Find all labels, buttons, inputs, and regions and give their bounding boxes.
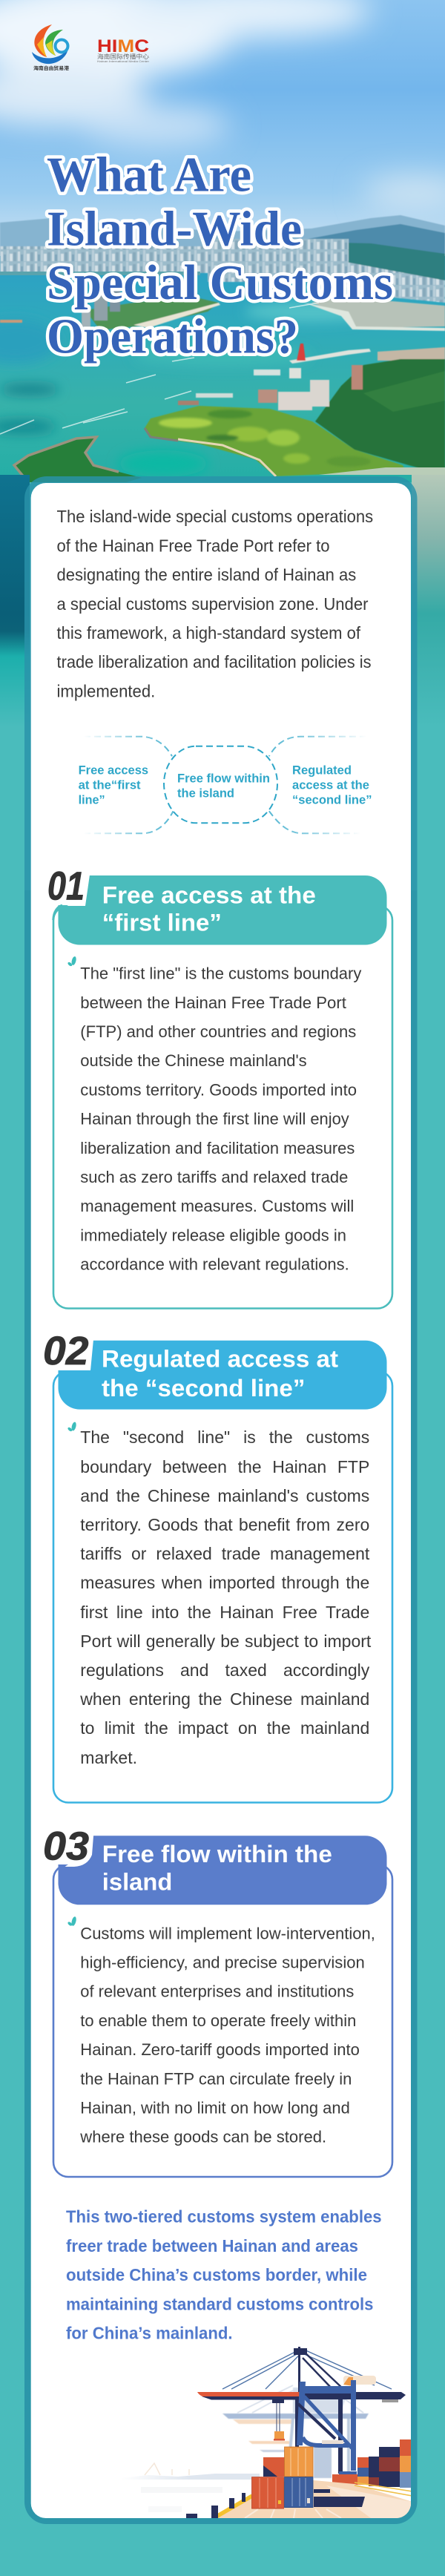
intro text: The island-wide special customs operations — [56, 507, 373, 526]
body text 01: between the Hainan Free Trade Port — [80, 993, 346, 1012]
body text 02: when entering the Chinese mainland — [80, 1689, 369, 1709]
heading 03 — [102, 1841, 332, 1895]
hoist and cargo — [272, 2399, 284, 2403]
intro text: this framework, a high-standard system of — [56, 623, 361, 643]
number 03: 03 — [43, 1824, 89, 1869]
quay ground — [186, 2480, 412, 2518]
intro text — [56, 507, 373, 700]
heading 03: Free flow within the — [102, 1841, 332, 1867]
body text 02: to limit the impact on the mainland — [80, 1718, 369, 1738]
label: first line: Free access — [79, 763, 148, 777]
label: free flow — [177, 772, 270, 801]
logo: HIMC: HIMC — [97, 36, 149, 56]
body text 01 — [80, 965, 361, 1274]
body text 01: liberalization and facilitation measures — [80, 1139, 355, 1157]
intro text: implemented. — [56, 681, 155, 700]
heading 02: Regulated access at — [102, 1346, 338, 1373]
title: Special Customs — [47, 255, 393, 310]
label: free flow: the island — [177, 787, 234, 801]
body text 03: of relevant enterprises and institutions — [80, 1982, 354, 2001]
heading 01: Free access at the — [102, 882, 316, 909]
closing statement: for China’s mainland. — [66, 2324, 233, 2343]
closing statement — [66, 2207, 382, 2343]
illustration: port with crane and containers — [121, 2347, 412, 2518]
logo caption: 海南自由贸易港 — [33, 65, 70, 71]
logo: HIMC: 海南国际传播中心 — [97, 53, 149, 60]
body text 03: Customs will implement low-intervention, — [80, 1924, 375, 1942]
body text 02: market. — [80, 1748, 137, 1767]
hero aerial photo of the coast — [0, 0, 445, 482]
body text 03: Hainan, with no limit on how long and — [80, 2098, 350, 2117]
body text 01: Hainan through the first line will enjoy — [80, 1110, 349, 1128]
body text 01: (FTP) and other countries and regions — [80, 1022, 356, 1041]
section 03 — [37, 1824, 392, 2177]
label: free flow: Free flow within — [177, 772, 270, 785]
intro text: of the Hainan Free Trade Port refer to — [56, 536, 329, 555]
label: first line: line” — [79, 794, 105, 807]
body text 01: accordance with relevant regulations. — [80, 1255, 349, 1274]
body text 01: such as zero tariffs and relaxed trade — [80, 1168, 348, 1186]
label: first line: at the“first — [79, 779, 141, 792]
icon: leaf bullet — [67, 956, 77, 967]
body text 01: immediately release eligible goods in — [80, 1226, 346, 1244]
foreground containers — [252, 2447, 313, 2508]
body text 03 — [79, 1924, 375, 2146]
main panel — [24, 476, 417, 2524]
diagram: three customs concepts — [79, 737, 372, 833]
closing statement: maintaining standard customs controls — [66, 2294, 374, 2313]
body text 02: boundary between the Hainan FTP — [80, 1457, 369, 1476]
icon: leaf bullet — [67, 1422, 77, 1432]
main crane — [197, 2347, 406, 2477]
label: second line: Regulated — [292, 763, 352, 777]
body text 02: regulations and taxed accordingly — [80, 1660, 369, 1680]
section 02 — [37, 1329, 392, 1803]
body text 01: management measures. Customs will — [80, 1197, 354, 1215]
intro text: designating the entire island of Hainan as — [56, 565, 356, 585]
heading 02 — [102, 1346, 338, 1402]
heading 01 — [102, 882, 316, 936]
side strips where the photo fades into teal — [0, 475, 445, 727]
body text 01: The "first line" is the customs boundary — [80, 965, 361, 983]
title: Island-Wide — [47, 201, 302, 256]
body text 02: and the Chinese mainland's customs — [80, 1486, 369, 1505]
closing statement: freer trade between Hainan and areas — [66, 2236, 358, 2255]
body text 03: high-efficiency, and precise supervision — [80, 1953, 365, 1972]
bollards — [186, 2493, 245, 2518]
logo: Hainan Free Trade Port — [32, 24, 70, 71]
label: second line: access at the — [292, 779, 369, 792]
distant skyline — [139, 2462, 260, 2493]
label: second line: “second line” — [292, 794, 372, 807]
intro text: trade liberalization and facilitation policies is — [56, 652, 371, 671]
title: What Are — [47, 148, 251, 203]
title: Operations? — [47, 309, 298, 364]
logo: HIMC: Hainan International Media Center — [97, 60, 150, 63]
body text 02: measures when imported through the — [80, 1573, 369, 1592]
body text 02: territory. Goods that benefit from zero — [80, 1515, 369, 1534]
heading 02: the “second line” — [102, 1375, 305, 1402]
body text 03: Hainan. Zero-tariff goods imported into — [80, 2040, 360, 2059]
number 01: 01 — [47, 864, 85, 908]
body text 03: the Hainan FTP can circulate freely in — [80, 2069, 352, 2088]
body text 02: Port will generally be subject to import — [80, 1632, 371, 1651]
background cranes — [222, 2385, 369, 2478]
icon: leaf bullet — [67, 1916, 77, 1927]
body text 01: outside the Chinese mainland's — [80, 1051, 307, 1070]
section 01 — [47, 864, 392, 1309]
closing statement: This two-tiered customs system enables — [66, 2207, 382, 2227]
body text 01: customs territory. Goods imported into — [80, 1080, 357, 1099]
heading 03: island — [102, 1868, 172, 1895]
body text 02: The "second line" is the customs — [80, 1427, 369, 1447]
number 02: 02 — [43, 1329, 89, 1373]
heading 01: “first line” — [102, 909, 222, 936]
body text 02: tariffs or relaxed trade management — [80, 1544, 369, 1563]
label: second line — [292, 763, 372, 807]
body text 03: where these goods can be stored. — [79, 2128, 326, 2146]
body text 02: first line into the Hainan Free Trade — [80, 1603, 369, 1622]
right container stacks — [332, 2439, 412, 2488]
label: first line — [79, 763, 148, 807]
title — [47, 148, 393, 364]
closing statement: outside China’s customs border, while — [66, 2265, 367, 2284]
body text 03: to enable them to operate freely within — [80, 2011, 356, 2030]
intro text: a special customs supervision zone. Under — [56, 594, 369, 614]
body text 02 — [80, 1427, 371, 1767]
